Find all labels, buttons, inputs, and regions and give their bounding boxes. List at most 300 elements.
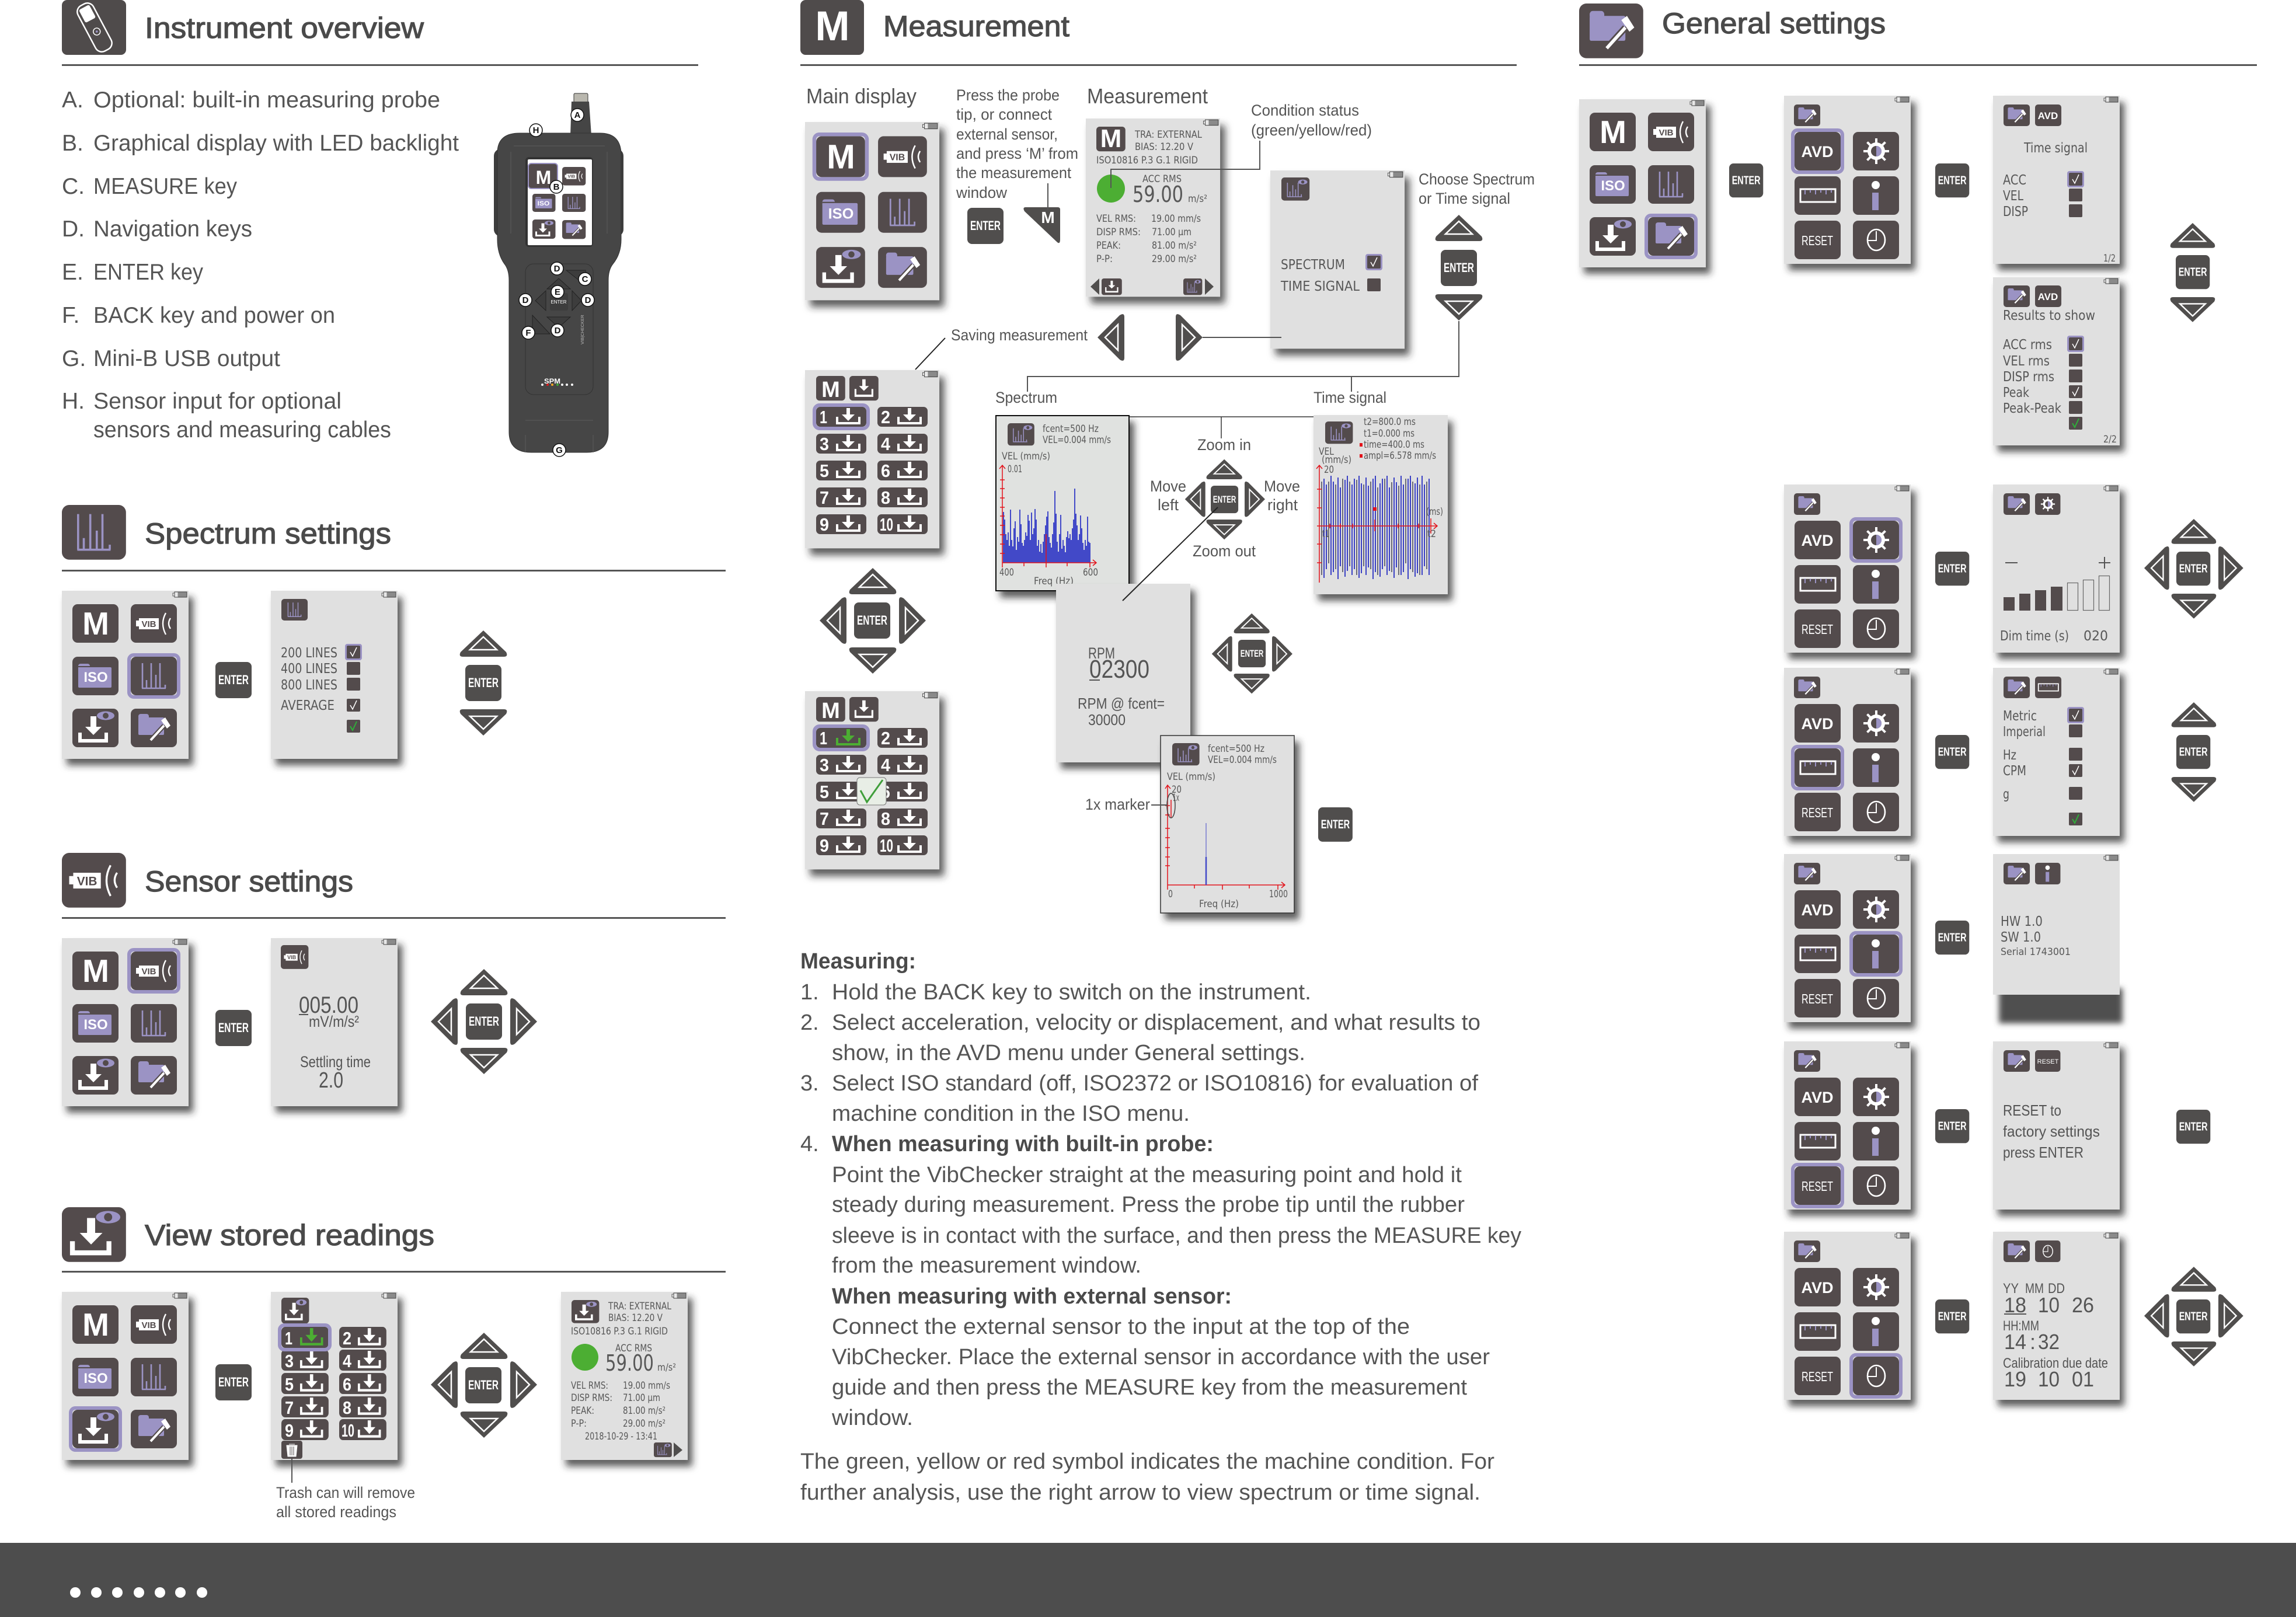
- device illustration: D: [522, 295, 529, 305]
- screen: date and time: 10: [2038, 1367, 2060, 1391]
- chart: time signal waveform: [1322, 476, 1429, 579]
- icon: sensor: [62, 853, 126, 908]
- screen: settings menu, info selected: AVD: [1801, 901, 1834, 919]
- connector: right key to choice screen: [1203, 337, 1281, 338]
- screen: spectrum chart: 0.01: [1008, 464, 1022, 475]
- panel: sensor settings section: [62, 853, 726, 1106]
- screen: settings menu, info selected: [1784, 854, 1911, 1022]
- text block: measuring instructions: Measuring:: [800, 949, 916, 974]
- connector: trash can note: [291, 1459, 292, 1483]
- navigation keys: ENTER: [469, 1014, 499, 1029]
- screen: factory reset: [1993, 1041, 2120, 1210]
- screen: date and time: [1993, 1232, 2120, 1400]
- screen: save confirmed: 4: [881, 755, 891, 775]
- screen: main menu, stored selected: VIB: [141, 1320, 156, 1330]
- key: enter: ENTER: [1938, 1120, 1967, 1133]
- heading: measurement: Measurement: [883, 10, 1069, 43]
- screen: save list: 2: [881, 407, 890, 427]
- text: press the probe note: [956, 86, 1078, 201]
- label: main display: Main display: [806, 84, 917, 108]
- list: instrument parts: E.: [62, 260, 83, 285]
- screen: measurement: PEAK:: [1096, 240, 1121, 252]
- screen: AVD time signal: [1993, 96, 2120, 264]
- screen: RPM: [1056, 584, 1190, 762]
- panel: general settings section: [1579, 4, 2257, 1400]
- chart: spectrum bars: [1004, 489, 1090, 563]
- screen: measurement: VEL RMS:: [1096, 213, 1136, 225]
- list: instrument parts: sensors and measuring cables: [93, 417, 391, 442]
- navigation keys: [2144, 519, 2243, 619]
- screen: save confirmed: 3: [820, 755, 829, 775]
- screen: measurement: P-P:: [1096, 253, 1113, 265]
- screen: main menu, spectrum selected: ISO: [83, 670, 108, 685]
- screen: measurement: 71.00 µm: [1152, 226, 1191, 238]
- screen: stored list: 1: [285, 1328, 292, 1348]
- heading: instrument overview: Instrument overview: [145, 12, 424, 44]
- callout letters: [519, 109, 594, 456]
- label: measurement: Measurement: [1087, 84, 1208, 108]
- labels: move left and right: Move: [1150, 478, 1186, 495]
- key: enter: [1935, 1299, 1969, 1333]
- screen: save list: 8: [881, 487, 890, 508]
- device illustration: D: [555, 326, 561, 336]
- screen: AVD time signal: DISP: [2003, 204, 2028, 219]
- screen: save list: 3: [820, 434, 829, 454]
- icon: spectrum: [62, 505, 126, 560]
- key: enter: [2176, 1110, 2210, 1144]
- text block: measuring instructions: When measuring with built-in probe:: [832, 1132, 1214, 1156]
- screen: units: Metric: [2003, 709, 2037, 724]
- key: enter: ENTER: [218, 1020, 249, 1035]
- screen: instrument info: Serial 1743001: [2001, 946, 2071, 958]
- screen: save list: M: [821, 378, 840, 402]
- screen: measurement: ACC RMS: [1142, 173, 1182, 185]
- screen: measurement: 19.00 mm/s: [1151, 213, 1201, 225]
- screen: measurement: M: [1100, 124, 1121, 153]
- icon: sensor: VIB: [77, 874, 97, 888]
- screen: 1x marker chart: 20: [1172, 784, 1182, 796]
- label: condition status: [1251, 102, 1372, 139]
- screen: spectrum chart: VEL=0.004 mm/s: [1043, 434, 1111, 446]
- key: enter: ENTER: [1938, 1310, 1967, 1323]
- screen: 1x marker chart: VEL (mm/s): [1167, 771, 1215, 783]
- screen: stored reading detail: DISP RMS:: [571, 1392, 612, 1404]
- screen: spectrum lines: 200 LINES: [281, 646, 337, 661]
- screen: date and time: DD: [2048, 1281, 2065, 1297]
- label: condition status: (green/yellow/red): [1251, 121, 1372, 139]
- screen: time signal chart: t2: [1427, 528, 1436, 540]
- screen: RPM: 02300: [1089, 655, 1149, 684]
- screen: main menu, sensor selected: M: [82, 953, 109, 989]
- key: enter: [1935, 163, 1969, 197]
- footer dots: [70, 1587, 207, 1598]
- navigation keys: [2172, 702, 2216, 802]
- list: instrument parts: C.: [62, 174, 85, 199]
- screen: stored reading detail: ACC RMS: [615, 1343, 652, 1354]
- key: measure: [1023, 207, 1060, 243]
- screen: stored list: 5: [285, 1374, 294, 1395]
- screen: settings menu, brightness selected: [1784, 485, 1911, 653]
- screen: stored list: 7: [285, 1398, 294, 1418]
- screen: spectrum chart: 400: [999, 567, 1014, 579]
- text block: measuring instructions: 1.: [800, 980, 819, 1005]
- screen: measurement: BIAS: 12.20 V: [1135, 141, 1193, 153]
- list: instrument parts: Navigation keys: [93, 217, 252, 242]
- screen: AVD time signal: ACC: [2003, 173, 2026, 188]
- key: enter: [215, 1364, 252, 1400]
- screen: sensitivity: mV/m/s²: [309, 1013, 359, 1030]
- screen: main menu, sensor selected: VIB: [141, 967, 156, 977]
- screen: units: [1993, 668, 2120, 836]
- screen: settings menu, clock selected: RESET: [1802, 1369, 1833, 1384]
- screen: main menu, settings selected: ISO: [1601, 178, 1625, 194]
- key: enter: ENTER: [1938, 174, 1967, 187]
- screen: backlight: Dim time (s): [2000, 629, 2069, 644]
- screen: measurement: [1086, 119, 1220, 297]
- screen: AVD results to show: Peak: [2003, 385, 2030, 400]
- connector: saving measurement: [915, 338, 945, 370]
- screen: sensitivity: VIB: [287, 954, 296, 960]
- screen: RPM: 30000: [1088, 711, 1126, 729]
- label: 1x marker: 1x marker: [1085, 796, 1150, 813]
- navigation keys: zoom: [1185, 459, 1265, 539]
- screen: AVD results to show: DISP rms: [2003, 370, 2054, 385]
- labels: move left and right: Move: [1264, 478, 1300, 495]
- text block: measuring instructions: further analysis, use the right arrow to view spectrum or time signal.: [800, 1480, 1480, 1505]
- text block: measuring instructions: show, in the AVD menu under General settings.: [832, 1041, 1305, 1065]
- screen: spectrum chart: fcent=500 Hz: [1043, 423, 1099, 435]
- screen: AVD time signal: VEL: [2003, 189, 2023, 204]
- screen: spectrum lines: 400 LINES: [281, 661, 337, 677]
- screen: settings menu, AVD selected: RESET: [1802, 233, 1833, 248]
- list: instrument parts: BACK key and power on: [93, 303, 335, 328]
- text block: measuring instructions: steady during measurement. Press the probe tip until the rubber: [832, 1193, 1465, 1217]
- screen: main menu, sensor selected: [62, 938, 189, 1106]
- screen: main menu, spectrum selected: M: [82, 605, 109, 642]
- screen: units: CPM: [2003, 764, 2026, 779]
- screen: save confirmed: 6: [881, 782, 890, 802]
- key: enter: [215, 662, 252, 698]
- screen: factory reset: RESET: [2037, 1058, 2059, 1065]
- screen: main display: ISO: [828, 205, 853, 222]
- screen: stored reading detail: BIAS: 12.20 V: [608, 1312, 663, 1324]
- label: choose spectrum or time signal: Choose Spectrum: [1419, 170, 1535, 188]
- key: enter: [1935, 735, 1969, 769]
- screen: main menu, spectrum selected: VIB: [141, 619, 156, 629]
- screen: time signal chart: (mm/s): [1322, 454, 1351, 466]
- screen: date and time: MM: [2025, 1281, 2044, 1297]
- navigation keys: RPM: ENTER: [1241, 648, 1263, 659]
- heading: spectrum settings: Spectrum settings: [145, 517, 391, 550]
- text: press the probe note: and press ‘M’ from: [956, 145, 1078, 162]
- footer band: [0, 1543, 2296, 1617]
- key: enter: ENTER: [218, 672, 249, 687]
- icon: general settings: [1579, 4, 1643, 58]
- screen: spectrum lines: 800 LINES: [281, 678, 337, 693]
- screen: factory reset: factory settings: [2003, 1123, 2100, 1140]
- screen: save list: 1: [820, 407, 827, 427]
- screen: main menu, stored selected: [62, 1292, 189, 1460]
- screen: save list: 7: [820, 487, 829, 508]
- icon: measurement M: M: [815, 4, 850, 50]
- key: measure: M: [1041, 208, 1055, 226]
- screen: stored reading detail: [561, 1292, 688, 1460]
- device illustration: M: [536, 167, 551, 188]
- screen: backlight: 020: [2084, 629, 2108, 644]
- key: enter: [1729, 163, 1763, 197]
- icon: trash can: [281, 1441, 302, 1459]
- screen: stored list: 4: [343, 1351, 352, 1371]
- screen: date and time: 14: [2004, 1330, 2026, 1354]
- screen: save confirmed: 1: [820, 728, 827, 748]
- list: instrument parts: Graphical display with LED backlight: [93, 131, 459, 156]
- screen: stored reading detail: VEL RMS:: [571, 1380, 608, 1392]
- screen: spectrum chart: Freq (Hz): [1034, 576, 1074, 587]
- text block: measuring instructions: 3.: [800, 1071, 819, 1096]
- screen: date and time: 26: [2072, 1293, 2094, 1317]
- device illustration: VIB|CHECKER: [580, 315, 585, 344]
- screen: date and time: 10: [2038, 1293, 2060, 1317]
- device illustration: A: [574, 110, 581, 120]
- key: enter: ENTER: [2179, 1120, 2208, 1134]
- screen: save list: 4: [881, 434, 891, 454]
- screen: 1x marker chart: Freq (Hz): [1199, 898, 1239, 910]
- device illustration: F: [525, 328, 531, 338]
- screen: settings menu, units selected: AVD: [1801, 715, 1834, 733]
- screen: 1x marker chart: 0: [1168, 888, 1173, 900]
- screen: stored list: 6: [343, 1374, 351, 1395]
- navigation keys: [460, 630, 507, 736]
- screen: spectrum lines: AVERAGE: [281, 698, 335, 713]
- screen: main display: [805, 122, 939, 300]
- labels: move left and right: right: [1267, 496, 1298, 514]
- device illustration: VIB: [567, 174, 576, 179]
- text block: measuring instructions: Select ISO standard (off, ISO2372 or ISO10816) for evaluation of: [832, 1071, 1478, 1096]
- screen: save confirmed: 5: [820, 782, 829, 802]
- screen: main menu, spectrum selected: [62, 591, 189, 759]
- screen: settings menu, AVD selected: [1784, 96, 1911, 264]
- screen: time signal chart: t1: [1322, 528, 1329, 540]
- device illustration: D: [554, 264, 560, 274]
- text block: measuring instructions: from the measurement window.: [832, 1253, 1141, 1278]
- text block: measuring instructions: Hold the BACK key to switch on the instrument.: [832, 980, 1311, 1005]
- list: instrument parts: H.: [62, 389, 85, 414]
- label: zoom out: Zoom out: [1193, 542, 1256, 560]
- screen: save list: 10: [880, 514, 893, 535]
- text: press the probe note: the measurement: [956, 164, 1071, 182]
- screen: main menu, sensor selected: ISO: [83, 1017, 108, 1033]
- screen: measurement: m/s²: [1188, 193, 1207, 205]
- screen: date and time: 32: [2038, 1330, 2060, 1354]
- navigation keys: up enter down: ENTER: [1444, 260, 1474, 275]
- list: instrument parts: Mini-B USB output: [93, 346, 280, 371]
- text block: measuring instructions: [800, 949, 1521, 1505]
- text block: measuring instructions: Point the VibChecker straight at the measuring point and hold it: [832, 1163, 1462, 1187]
- panel: measurement section: [800, 0, 1535, 1505]
- screen: measurement: DISP RMS:: [1096, 226, 1141, 238]
- navigation keys: ENTER: [2179, 266, 2207, 279]
- screen: 1x marker chart: [1161, 736, 1294, 913]
- text block: measuring instructions: machine condition in the ISO menu.: [832, 1102, 1190, 1126]
- navigation keys: ENTER: [468, 675, 499, 690]
- screen: units: g: [2003, 787, 2009, 802]
- note: trash can: [276, 1484, 415, 1521]
- key: enter: ENTER: [1938, 745, 1967, 759]
- screen: stored reading detail: 81.00 m/s²: [623, 1405, 666, 1417]
- text block: measuring instructions: VibChecker. Place the external sensor in accordance with the user: [832, 1345, 1490, 1369]
- screen: sensitivity: 005.00: [299, 992, 358, 1018]
- text block: measuring instructions: The green, yellow or red symbol indicates the machine condition. For: [800, 1449, 1494, 1474]
- list: instrument parts: F.: [62, 303, 79, 328]
- device illustration: SPM: [544, 377, 560, 385]
- screen: AVD time signal: 1/2: [2103, 253, 2116, 264]
- screen: spectrum chart: 600: [1083, 567, 1098, 579]
- list: instrument parts: ENTER key: [93, 260, 203, 285]
- text block: measuring instructions: guide and then press the MEASURE key from the measurement: [832, 1375, 1467, 1400]
- screen: time signal chart: time=400.0 ms: [1364, 439, 1424, 451]
- key: enter: [1935, 1109, 1969, 1143]
- list: instrument parts: G.: [62, 346, 86, 371]
- screen: settings menu, units selected: RESET: [1802, 805, 1833, 820]
- screen: measurement: 59.00: [1133, 182, 1183, 207]
- connector: zoom: [1129, 417, 1314, 438]
- text block: measuring instructions: sleeve is in contact with the surface, and then press the MEASURE key: [832, 1224, 1521, 1248]
- screen: 1x marker chart: VEL=0.004 mm/s: [1208, 754, 1277, 766]
- text block: measuring instructions: 4.: [800, 1132, 819, 1156]
- screen: save confirmed: 7: [820, 808, 829, 829]
- note: trash can: all stored readings: [276, 1503, 396, 1521]
- key: enter: [1935, 921, 1969, 954]
- screen: save confirmed: 10: [880, 835, 893, 856]
- screen: RPM: RPM: [1088, 644, 1115, 662]
- screen: settings menu, brightness selected: RESET: [1802, 622, 1833, 637]
- label: time signal: Time signal: [1314, 389, 1386, 406]
- screen: AVD results to show: Peak-Peak: [2003, 401, 2062, 416]
- screen: save list: 9: [820, 514, 829, 535]
- heading: view stored readings: View stored readings: [145, 1219, 434, 1252]
- screen: stored reading detail: 19.00 mm/s: [623, 1380, 670, 1392]
- screen: settings menu, clock selected: [1784, 1232, 1911, 1400]
- screen: units: Hz: [2003, 748, 2016, 763]
- labels: move left and right: [1150, 478, 1300, 514]
- navigation keys: ENTER: [468, 1378, 499, 1392]
- text block: measuring instructions: 2.: [800, 1010, 819, 1035]
- screen: main menu, stored selected: ISO: [83, 1371, 108, 1386]
- screen: AVD time signal: AVD: [2038, 110, 2058, 121]
- screen: measurement: 29.00 m/s²: [1152, 253, 1197, 265]
- screen: stored list: 2: [343, 1328, 351, 1348]
- screen: stored list: [271, 1292, 398, 1460]
- screen: 1x marker chart: 1x: [1173, 792, 1179, 804]
- screen: spectrum chart: [996, 416, 1129, 591]
- screen: main menu, settings selected: [1579, 99, 1706, 267]
- screen: stored reading detail: m/s²: [657, 1362, 676, 1374]
- screen: factory reset: RESET to: [2003, 1102, 2061, 1119]
- screen: time signal chart: VEL: [1319, 446, 1334, 458]
- label: spectrum: Spectrum: [995, 389, 1057, 406]
- text: press the probe note: window: [956, 184, 1007, 201]
- key: enter: [967, 208, 1004, 244]
- screen: RPM: RPM @ fcent=: [1078, 695, 1165, 712]
- screen: 1x marker chart: 1000: [1269, 888, 1288, 900]
- screen: 1x marker chart: fcent=500 Hz: [1208, 743, 1264, 755]
- screen: units: Imperial: [2003, 724, 2046, 740]
- key: enter: ENTER: [1321, 818, 1350, 831]
- list: instrument parts: Sensor input for optional: [93, 389, 342, 414]
- screen: main menu, stored selected: M: [82, 1306, 109, 1343]
- navigation keys: [431, 1333, 537, 1438]
- text: press the probe note: external sensor,: [956, 126, 1058, 143]
- key: enter: ENTER: [970, 218, 1001, 233]
- screen: spectrum or time signal choice: [1270, 170, 1405, 349]
- screen: time signal chart: (ms): [1426, 506, 1443, 518]
- screen: stored reading detail: ISO10816 P.3 G.1 RIGID: [571, 1326, 668, 1337]
- screen: time signal chart: ampl=6.578 mm/s: [1364, 450, 1436, 462]
- connector: zoom keys to RPM: [1123, 507, 1218, 601]
- text block: measuring instructions: When measuring with external sensor:: [832, 1284, 1232, 1309]
- screen: date and time: YY: [2003, 1281, 2019, 1297]
- screen: settings menu, info selected: RESET: [1802, 991, 1833, 1006]
- device illustration: E: [555, 287, 560, 297]
- device illustration: ISO: [538, 200, 549, 207]
- navigation keys: ENTER: [2179, 745, 2208, 759]
- list: instrument parts: D.: [62, 217, 85, 242]
- text block: measuring instructions: window.: [831, 1406, 913, 1430]
- screen: instrument info: SW 1.0: [2001, 930, 2041, 945]
- screen: settings menu, AVD selected: AVD: [1801, 143, 1834, 161]
- screen: stored reading detail: 2018-10-29 - 13:41: [585, 1431, 657, 1442]
- label: saving measurement: Saving measurement: [951, 326, 1088, 344]
- panel: instrument overview section: [62, 0, 698, 456]
- device illustration: C: [582, 274, 588, 284]
- navigation keys: RPM: [1212, 614, 1292, 694]
- screen: main menu, settings selected: VIB: [1659, 128, 1674, 138]
- screen: date and time: 18: [2004, 1293, 2026, 1317]
- screen: stored reading detail: 29.00 m/s²: [623, 1418, 666, 1430]
- screen: stored reading detail: P-P:: [571, 1418, 587, 1430]
- screen: save confirmed: 2: [881, 728, 890, 748]
- navigation keys: ENTER: [2179, 1310, 2208, 1323]
- screen: AVD time signal: Time signal: [2023, 141, 2088, 156]
- device illustration: G: [556, 445, 563, 455]
- screen: measurement: 81.00 m/s²: [1152, 240, 1197, 252]
- icon: measurement M: [800, 0, 864, 55]
- screen: stored list: 3: [285, 1351, 294, 1371]
- screen: AVD results to show: [1993, 277, 2120, 445]
- screen: date and time: :: [2030, 1330, 2036, 1354]
- key: enter: ENTER: [218, 1375, 249, 1389]
- screen: AVD results to show: ACC rms: [2003, 337, 2052, 353]
- screen: date and time: 01: [2072, 1367, 2094, 1391]
- screen: main menu, settings selected: M: [1600, 114, 1626, 150]
- screen: stored list: 9: [285, 1420, 294, 1441]
- screen: time signal chart: t1=0.000 ms: [1364, 428, 1414, 440]
- screen: settings menu, brightness selected: AVD: [1801, 532, 1834, 549]
- label: choose spectrum or time signal: [1419, 170, 1535, 207]
- panel: spectrum settings section: [62, 505, 726, 759]
- label: condition status: Condition status: [1251, 102, 1359, 119]
- screen: main display: VIB: [890, 153, 905, 163]
- screen: settings menu, clock selected: AVD: [1801, 1279, 1834, 1297]
- icon: instrument: [62, 0, 126, 55]
- screen: instrument info: [1993, 854, 2123, 1023]
- screen: stored list: 8: [343, 1398, 351, 1418]
- key: enter: ENTER: [1938, 562, 1967, 576]
- screen: date and time: Calibration due date: [2003, 1355, 2108, 1371]
- screen: save list: 6: [881, 461, 890, 481]
- connector: condition status: [1111, 141, 1260, 188]
- screen: AVD results to show: 2/2: [2103, 434, 2117, 445]
